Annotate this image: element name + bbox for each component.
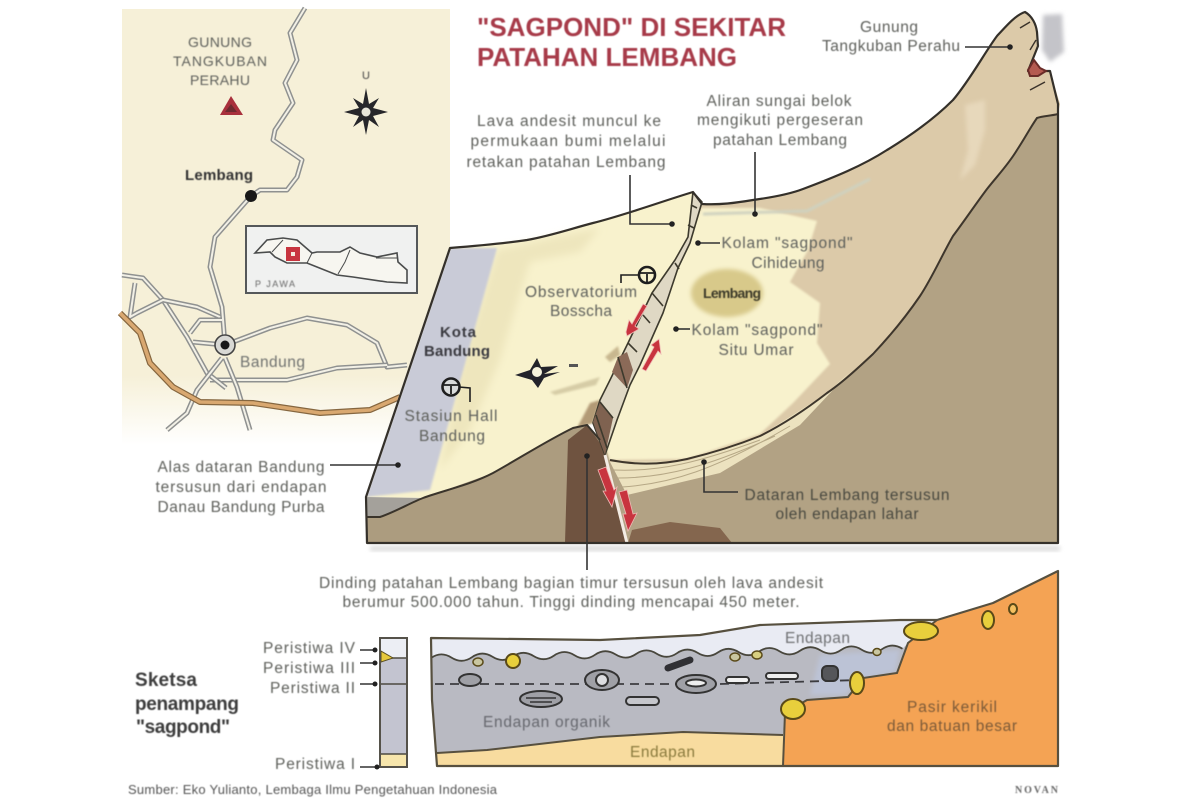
label: Stasiun Hall Bandung: [404, 408, 498, 445]
callout: Kolam sagpond Situ Umar: Kolam "sagpond": [692, 322, 822, 339]
panel: block diagram of the Lembang fault: [366, 12, 1064, 551]
heading: Sketsa penampang sagpond: Sketsa: [135, 670, 197, 691]
label: Pasir kerikil: dan batuan besar: [887, 718, 1017, 735]
label: Observatorium Bosscha: Observatorium: [525, 284, 637, 301]
callout: Dinding patahan Lembang: berumur 500.000 tahun. Tinggi dinding mencapai 450 meter.: [342, 594, 800, 611]
callout: Alas dataran Bandung: [156, 459, 401, 516]
label: Gunung Tangkuban Perahu: [173, 34, 267, 88]
event labels: Peristiwa I: [275, 756, 355, 773]
inset: Java island: P JAWA: [255, 279, 295, 289]
event labels: Peristiwa II: [270, 680, 355, 697]
label: Gunung Tangkuban Perahu: GUNUNG: [188, 34, 252, 50]
grey city strip: [366, 248, 497, 497]
brown lava wall: [565, 425, 627, 543]
title: PATAHAN LEMBANG: [477, 42, 737, 72]
smoke plume: [1042, 14, 1064, 62]
left block: tan front: [367, 425, 627, 543]
callout: Kolam sagpond Cihideung: [695, 235, 852, 272]
callout: Alas dataran Bandung: Danau Bandung Purba: [158, 499, 325, 516]
orange ring road: [120, 313, 400, 413]
river: [703, 179, 870, 214]
label: Observatorium Bosscha: [525, 284, 637, 320]
layer borders: [437, 620, 937, 766]
label: Observatorium Bosscha: Bosscha: [550, 303, 612, 320]
label: Endapan organik: Endapan organik: [483, 714, 610, 731]
wavy erosion line: [431, 646, 902, 661]
source line: Sumber: Eko Yulianto, Lembaga Ilmu Pengetahuan Indonesia: [128, 782, 498, 797]
callout: Alas dataran Bandung: tersusun dari endapan: [156, 479, 326, 496]
callout: river bends: [697, 93, 863, 217]
callout: Gunung Tangkuban Perahu: Tangkuban Perahu: [822, 38, 960, 55]
credit: NOVAN: [1015, 785, 1059, 796]
callout: Dataran Lembang: oleh endapan lahar: [776, 506, 918, 523]
callout: river bends: mengikuti pergeseran: [697, 112, 863, 129]
inset: Java island: [246, 226, 417, 293]
callout: andesite lava: Lava andesit muncul ke: [477, 113, 661, 130]
label: Kota Bandung: Bandung: [424, 343, 490, 360]
callout: Kolam sagpond Situ Umar: [673, 322, 822, 359]
panel: location map: [120, 8, 450, 445]
icon: compass: U: [362, 70, 370, 82]
marker: Bandung: [215, 335, 235, 355]
callout: Dataran Lembang: Dataran Lembang tersusun: [744, 487, 950, 504]
callout: Kolam sagpond Cihideung: Kolam "sagpond": [722, 235, 852, 252]
town patch: Lembang: Lembang: [703, 285, 761, 301]
blue tint at right: [810, 650, 900, 695]
grey front corner: [366, 497, 423, 517]
icon: compass: [344, 70, 388, 135]
dark lava bed: [628, 522, 732, 543]
top sediment: [431, 620, 937, 661]
callout: river bends: patahan Lembang: [713, 132, 847, 149]
left block: yellow surface: [366, 192, 693, 498]
label: Gunung Tangkuban Perahu: PERAHU: [190, 72, 250, 88]
marker: Lembang: [245, 190, 257, 202]
callout: andesite lava: retakan patahan Lembang: [466, 154, 666, 171]
light lava band: [960, 100, 985, 180]
title: "SAGPOND" DI SEKITAR: [477, 12, 786, 42]
title: [477, 12, 786, 72]
block outline: [366, 12, 1058, 543]
callout: Dinding patahan Lembang: [319, 453, 824, 611]
yellow pebbles: [473, 604, 1017, 719]
callout: andesite lava: [466, 113, 675, 227]
label: Stasiun Hall Bandung: Stasiun Hall: [404, 408, 498, 425]
dashed event line: [435, 680, 860, 684]
orange gravel: [783, 571, 1058, 766]
map background: [122, 9, 450, 445]
town patch: Lembang: [691, 269, 763, 317]
event labels: Peristiwa IV: [263, 640, 356, 657]
label: Endapan bottom: Endapan: [630, 744, 695, 761]
roads: [122, 8, 407, 430]
label: Lembang: Lembang: [185, 167, 253, 184]
label: Gunung Tangkuban Perahu: TANGKUBAN: [173, 53, 267, 69]
event labels: Peristiwa III: [263, 660, 355, 677]
panel: event column: [263, 638, 407, 773]
callout: Dataran Lembang: [701, 459, 950, 523]
callout: Gunung Tangkuban Perahu: Gunung: [860, 19, 918, 36]
label: Bandung: Bandung: [240, 354, 305, 371]
strata layers: [610, 372, 850, 495]
shadow below block: [370, 546, 1060, 551]
callout: Alas dataran Bandung: Alas dataran Bandung: [158, 459, 324, 476]
label: Pasir kerikil: Pasir kerikil: [907, 699, 997, 716]
right block: tan base: [600, 100, 1058, 543]
lenses: [459, 660, 838, 707]
red fault arrows: [598, 304, 661, 531]
beige wash: [440, 228, 600, 470]
callout: Dinding patahan Lembang: Dinding patahan Lembang bagian timur tersusun oleh lava andesit: [319, 575, 824, 592]
heading: Sketsa penampang sagpond: "sagpond": [136, 717, 230, 738]
event arrows: [360, 648, 380, 770]
streaks near fault: [550, 346, 620, 428]
heading: Sketsa penampang sagpond: [135, 670, 239, 738]
callout: Kolam sagpond Cihideung: Cihideung: [752, 255, 824, 272]
column layers: [380, 638, 407, 767]
label: Kota Bandung: [424, 324, 490, 360]
callout: Gunung Tangkuban Perahu: [822, 19, 1013, 55]
icon: small compass star: [515, 358, 578, 388]
volcano crater: [1020, 22, 1046, 90]
strata outline: [610, 114, 1058, 464]
icon: observatory: [621, 267, 655, 283]
right block: mountain slope: [600, 12, 1060, 462]
pale yellow plain: [598, 208, 830, 460]
label: Stasiun Hall Bandung: Bandung: [419, 428, 485, 445]
callout: Kolam sagpond Situ Umar: Situ Umar: [718, 342, 794, 359]
icon: volcano triangle: [220, 96, 243, 115]
heading: Sketsa penampang sagpond: penampang: [135, 694, 239, 715]
label: Endapan top: Endapan: [785, 630, 850, 647]
callout: river bends: Aliran sungai belok: [706, 93, 852, 110]
section outline: [431, 571, 1058, 766]
event labels: [263, 640, 356, 773]
panel: sagpond cross-section: [431, 571, 1058, 766]
fault cut in front: [605, 455, 627, 543]
organic sediment: [431, 620, 937, 753]
bottom sediment: [437, 732, 783, 766]
label: Kota Bandung: Kota: [440, 324, 477, 341]
ridge line front: [366, 425, 600, 517]
fault band: [593, 192, 702, 455]
icon: station: [442, 378, 470, 402]
label: Pasir kerikil: [887, 699, 1017, 735]
callout: andesite lava: permukaan bumi melalui: [470, 133, 666, 150]
